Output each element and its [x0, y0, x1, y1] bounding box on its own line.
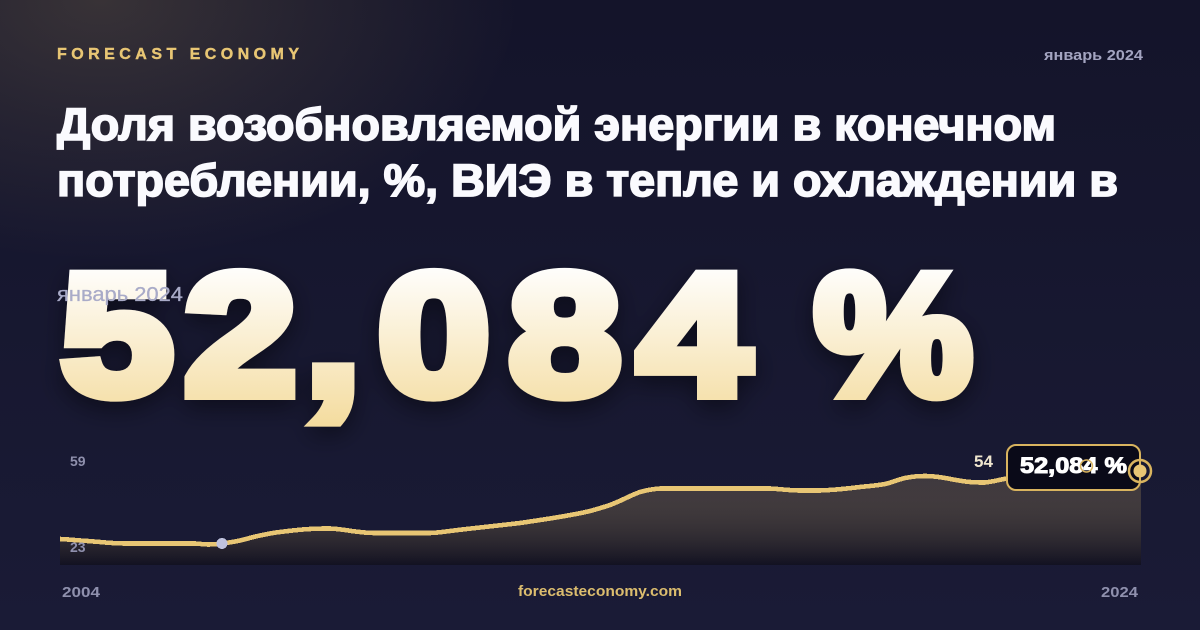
area chart — [60, 471, 1141, 565]
big value: 52,084 — [61, 239, 750, 431]
min marker — [216, 538, 228, 549]
title — [57, 99, 1118, 206]
peak label: 54 — [974, 452, 993, 471]
source site: forecasteconomy.com — [518, 583, 682, 600]
tooltip — [1007, 445, 1140, 490]
end year: 2024 — [1101, 584, 1139, 601]
brand label: FORECAST ECONOMY — [57, 46, 303, 63]
title: Доля возобновляемой энергии в конечном — [57, 99, 1056, 150]
axis max label: 59 — [70, 453, 86, 469]
big value: % — [815, 238, 972, 430]
tooltip: 52,084 % — [1020, 453, 1127, 478]
date overlapping value: январь 2024 — [57, 284, 183, 306]
axis min label: 23 — [70, 539, 86, 555]
date top right: январь 2024 — [1044, 47, 1144, 64]
current value marker — [1129, 460, 1151, 482]
start year: 2004 — [62, 584, 101, 601]
title: потреблении, %, ВИЭ в тепле и охлаждении в — [57, 155, 1118, 206]
small marker — [1080, 460, 1092, 472]
area fill — [60, 471, 1141, 565]
line — [60, 471, 1140, 544]
